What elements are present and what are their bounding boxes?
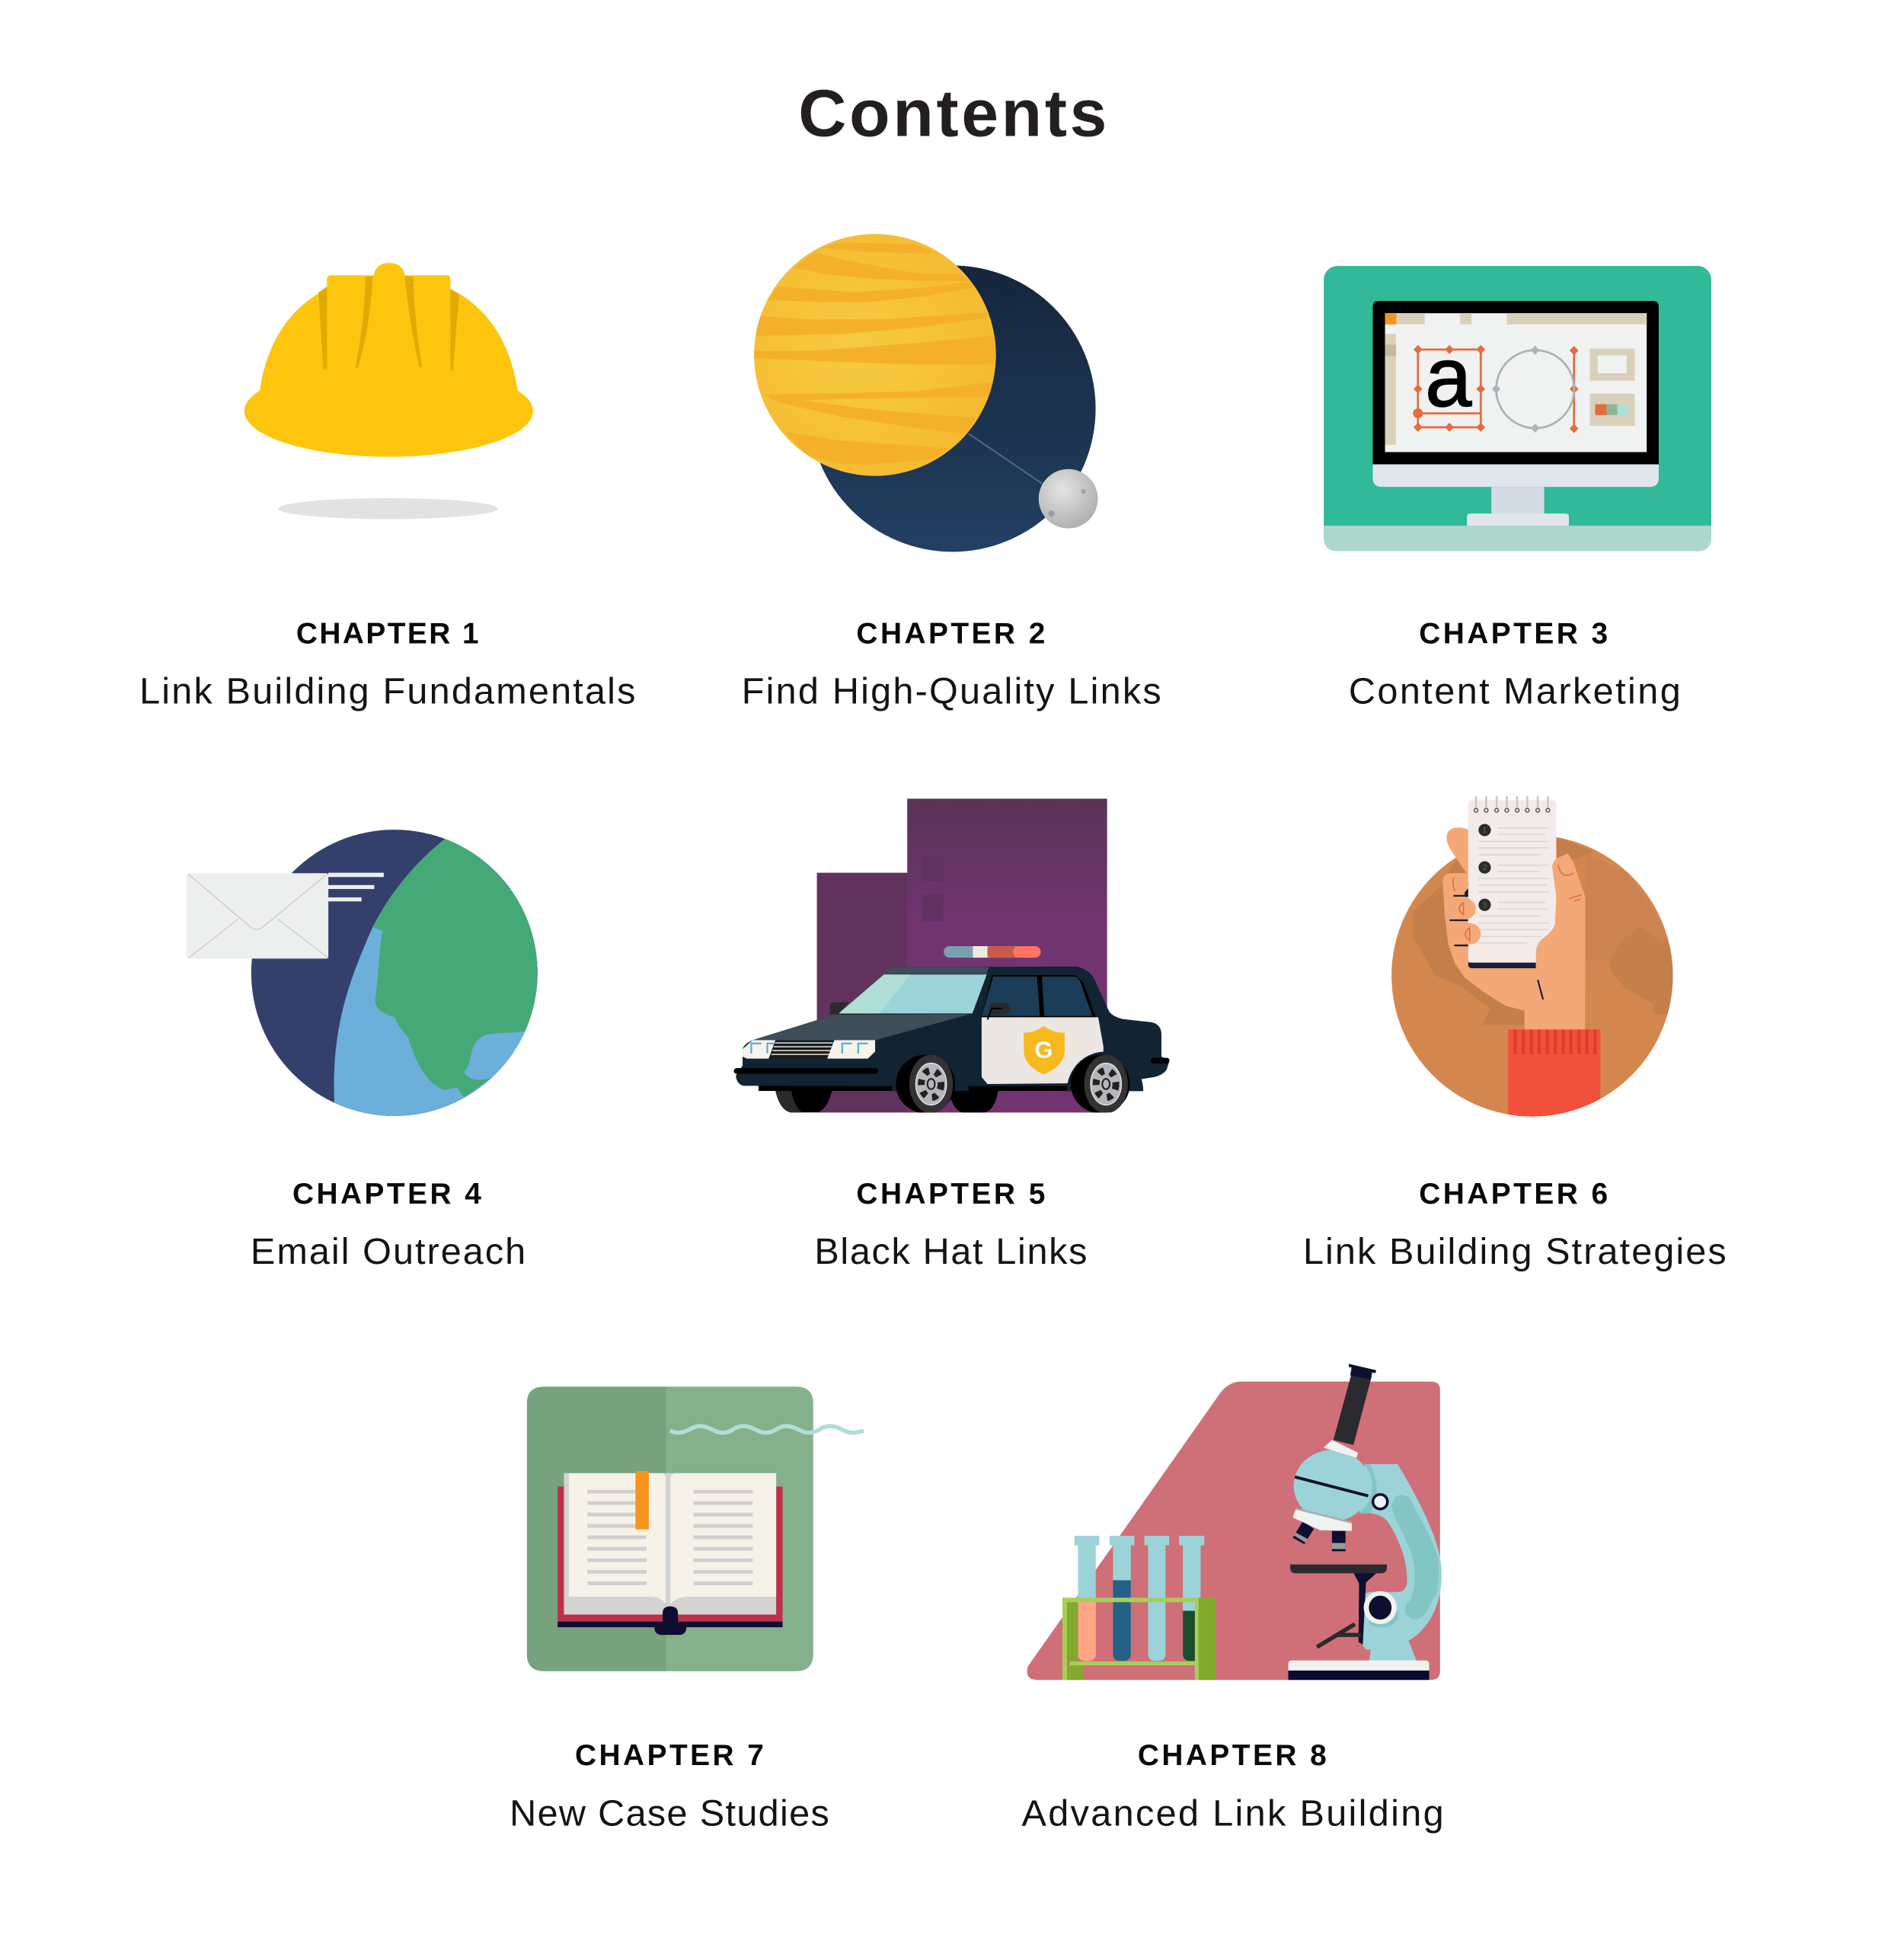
- chapter name: Black Hat Links: [814, 1231, 1087, 1272]
- shield badge: G: [1034, 1037, 1053, 1063]
- panel: chapter 2: [742, 234, 1161, 712]
- chapter name: New Case Studies: [510, 1792, 829, 1834]
- chapter name: Email Outreach: [251, 1231, 526, 1272]
- chapter name: Advanced Link Building: [1022, 1792, 1444, 1834]
- icon: hand holding notepad: [1391, 796, 1675, 1122]
- icon: microscope and test tubes: [1027, 1364, 1442, 1680]
- panel: chapter 6: [1303, 796, 1727, 1272]
- panel: chapter 4: [187, 814, 549, 1272]
- panel: chapter 8: [1022, 1364, 1444, 1834]
- chapter label: CHAPTER 1: [296, 617, 479, 650]
- chapter label: CHAPTER 5: [856, 1178, 1045, 1210]
- chapter label: CHAPTER 2: [856, 617, 1045, 650]
- icon: hand holding notepad: 2: [1483, 864, 1487, 872]
- chapter name: Find High-Quality Links: [742, 671, 1161, 712]
- panel: chapter 3: [1324, 266, 1711, 712]
- icon: monitor: [1324, 266, 1711, 551]
- chapter label: CHAPTER 7: [575, 1739, 764, 1772]
- title: Contents: [798, 75, 1107, 150]
- chapter label: CHAPTER 6: [1419, 1178, 1608, 1210]
- chapter label: CHAPTER 3: [1419, 617, 1608, 650]
- panel: chapter 7: [510, 1386, 864, 1834]
- icon: hard hat: [244, 263, 533, 519]
- shield badge: [1024, 1026, 1065, 1074]
- bookmark: [635, 1471, 649, 1530]
- panel: chapter 5: [734, 798, 1170, 1272]
- test tube rack: [1062, 1597, 1216, 1680]
- rear wheel: [1067, 1052, 1143, 1113]
- front wheel: [892, 1052, 969, 1113]
- chapter name: Link Building Fundamentals: [139, 671, 635, 712]
- chapter name: Content Marketing: [1349, 671, 1681, 712]
- test tubes: [1075, 1536, 1204, 1661]
- chapter name: Link Building Strategies: [1303, 1231, 1727, 1272]
- microscope: [1289, 1364, 1442, 1680]
- icon: open book: [527, 1386, 864, 1671]
- icon: hand holding notepad: 1: [1483, 827, 1487, 835]
- icon: planets: [746, 234, 1098, 552]
- panel: chapter 1: [139, 263, 635, 712]
- chapter label: CHAPTER 8: [1138, 1739, 1327, 1772]
- icon: globe with envelope: [187, 830, 538, 1116]
- letter a: a: [1425, 331, 1472, 424]
- chapter label: CHAPTER 4: [292, 1178, 481, 1210]
- icon: police car and buildings: [734, 798, 1170, 1113]
- icon: hand holding notepad: 3: [1483, 901, 1487, 910]
